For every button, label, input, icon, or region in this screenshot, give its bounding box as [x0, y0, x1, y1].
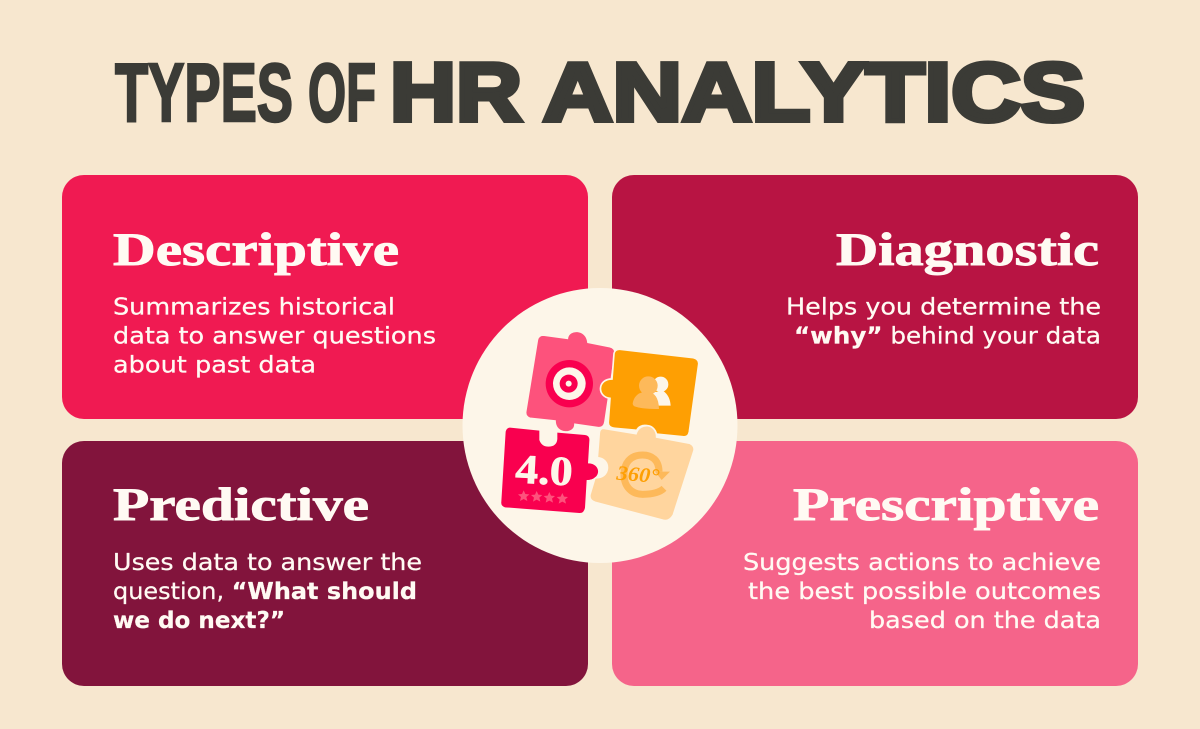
text: prescriptive body: the best possible outcomes [748, 579, 1101, 605]
heading: diagnostic: Diagnostic [836, 224, 1099, 276]
text: descriptive body: Summarizes historical [113, 294, 395, 320]
title [115, 46, 1085, 139]
text: diagnostic body: “why” behind your data [794, 324, 1101, 350]
title: ANALYTICS [543, 46, 1085, 138]
title: OF [308, 46, 376, 139]
text: descriptive body: about past data [113, 352, 316, 378]
text: prescriptive body [743, 550, 1101, 634]
puzzle piece: rating [501, 428, 598, 513]
text: diagnostic body [786, 294, 1101, 350]
puzzle piece: 360 [590, 426, 694, 521]
text: descriptive body [113, 294, 436, 378]
text: predictive body: we do next?” [113, 608, 285, 634]
rating number: 4.0 [514, 446, 574, 494]
puzzle pieces [501, 331, 699, 521]
center circle with puzzle [462, 288, 738, 563]
text: predictive body: question, “What should [113, 579, 417, 605]
text: diagnostic body: Helps you determine the [786, 294, 1101, 320]
puzzle piece: people [600, 349, 699, 437]
text: descriptive body: data to answer questions [113, 324, 436, 350]
text: predictive body [113, 550, 422, 634]
title: HR [390, 46, 522, 138]
panel: predictive [62, 441, 588, 686]
360 label: 360° [615, 462, 661, 488]
puzzle piece: target [526, 331, 615, 432]
text: prescriptive body: based on the data [869, 608, 1101, 634]
panel: diagnostic [612, 175, 1138, 419]
text: prescriptive body: Suggests actions to achieve [743, 550, 1101, 576]
panel: descriptive [62, 175, 588, 419]
panel: prescriptive [612, 441, 1138, 686]
heading: prescriptive: Prescriptive [793, 479, 1099, 531]
rating tab overlay [586, 463, 598, 480]
title: TYPES [115, 46, 293, 139]
rating stars [518, 490, 568, 504]
heading: predictive: Predictive [113, 479, 369, 531]
heading: descriptive: Descriptive [113, 224, 399, 276]
text: predictive body: Uses data to answer the [113, 550, 422, 576]
